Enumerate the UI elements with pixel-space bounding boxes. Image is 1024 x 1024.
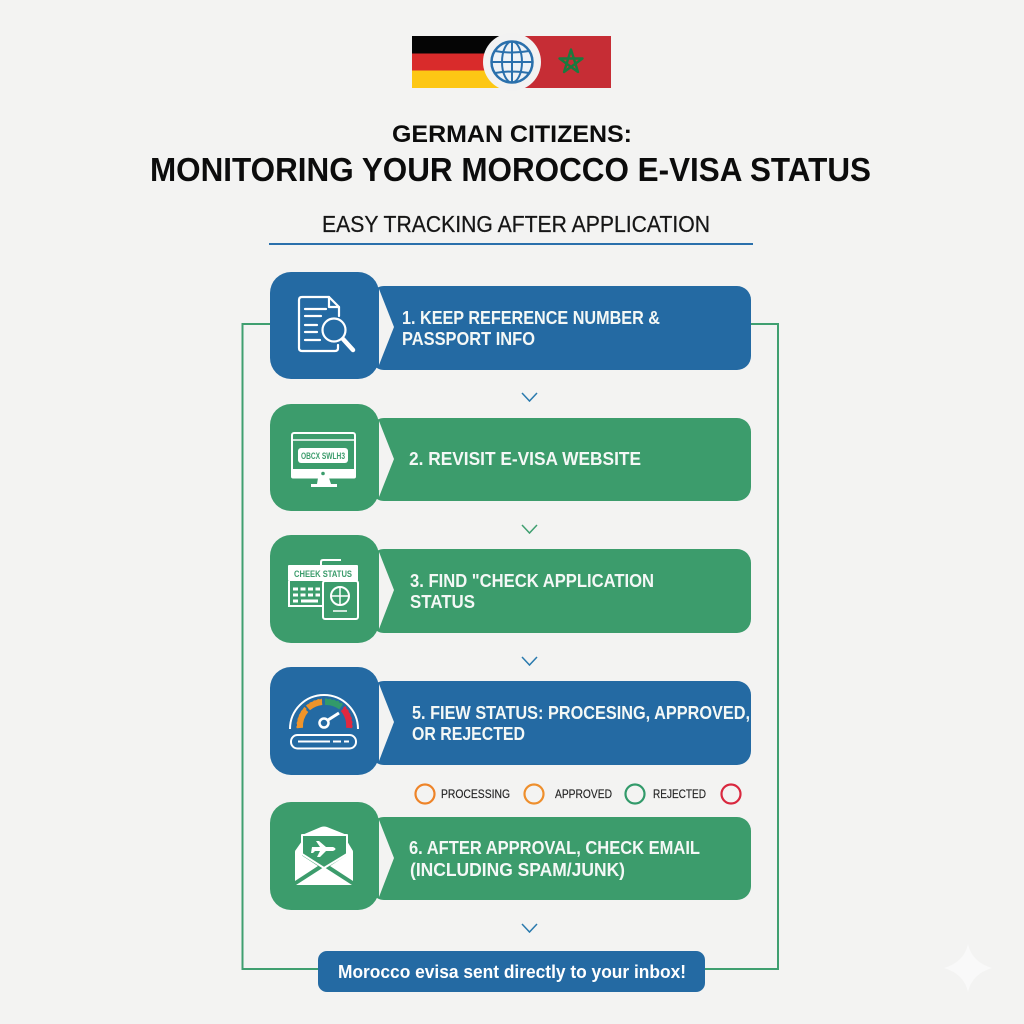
- arrow: [522, 525, 537, 533]
- German flag: [412, 36, 502, 88]
- arrow: [522, 393, 537, 401]
- header flags: Germany and Morocco with globe: [412, 33, 611, 91]
- step text: 3. FIND "CHECK APPLICATION: [410, 571, 654, 591]
- arrow: [522, 657, 537, 665]
- approved indicator: [524, 784, 544, 804]
- icon: status form and passport: CHEEK STATUS: [294, 569, 352, 580]
- legend labels: APPROVED: [555, 789, 612, 801]
- rejected indicator: [626, 784, 644, 804]
- callout: final message: [318, 951, 705, 992]
- icon: speedometer gauge: [290, 695, 358, 748]
- title: GERMAN CITIZENS:: [392, 121, 632, 148]
- legend labels: REJECTED: [653, 789, 706, 801]
- step 1: keep reference number: [270, 272, 751, 379]
- step text: 5. FIEW STATUS: PROCESING, APPROVED,: [412, 703, 750, 723]
- icon: computer monitor: [291, 433, 356, 487]
- step text: 2. REVISIT E-VISA WEBSITE: [409, 449, 641, 469]
- step text: PASSPORT INFO: [402, 329, 535, 349]
- title: [150, 121, 871, 188]
- step text: 1. KEEP REFERENCE NUMBER &: [402, 308, 660, 328]
- processing indicator: [416, 784, 434, 804]
- icon: envelope with plane: [295, 826, 353, 885]
- step 5: check email: [270, 802, 751, 910]
- Moroccan flag: [522, 36, 611, 88]
- step text: (INCLUDING SPAM/JUNK): [410, 860, 625, 880]
- title: MONITORING YOUR MOROCCO E-VISA STATUS: [150, 151, 871, 188]
- step 3: find check application status: [270, 535, 751, 643]
- connector frame: [242, 324, 778, 969]
- callout: final message: Morocco evisa sent directly to your inbox!: [338, 962, 686, 982]
- status legend: [416, 784, 740, 804]
- step text: 6. AFTER APPROVAL, CHECK EMAIL: [409, 838, 700, 858]
- icon: sparkle watermark: [944, 944, 992, 992]
- arrow: [522, 924, 537, 932]
- icon: computer monitor: OBCX SWLH3: [301, 451, 345, 461]
- icon: globe: [483, 33, 541, 91]
- icon: status form and passport: [288, 560, 358, 619]
- legend labels: PROCESSING: [441, 789, 510, 801]
- step text: STATUS: [410, 592, 475, 612]
- step 4: view status: [270, 667, 751, 775]
- icon: document with magnifier: [299, 297, 353, 351]
- subtitle: EASY TRACKING AFTER APPLICATION: [322, 211, 710, 237]
- fourth indicator: [722, 784, 740, 804]
- step 2: revisit website: [270, 404, 751, 511]
- step text: OR REJECTED: [412, 724, 525, 744]
